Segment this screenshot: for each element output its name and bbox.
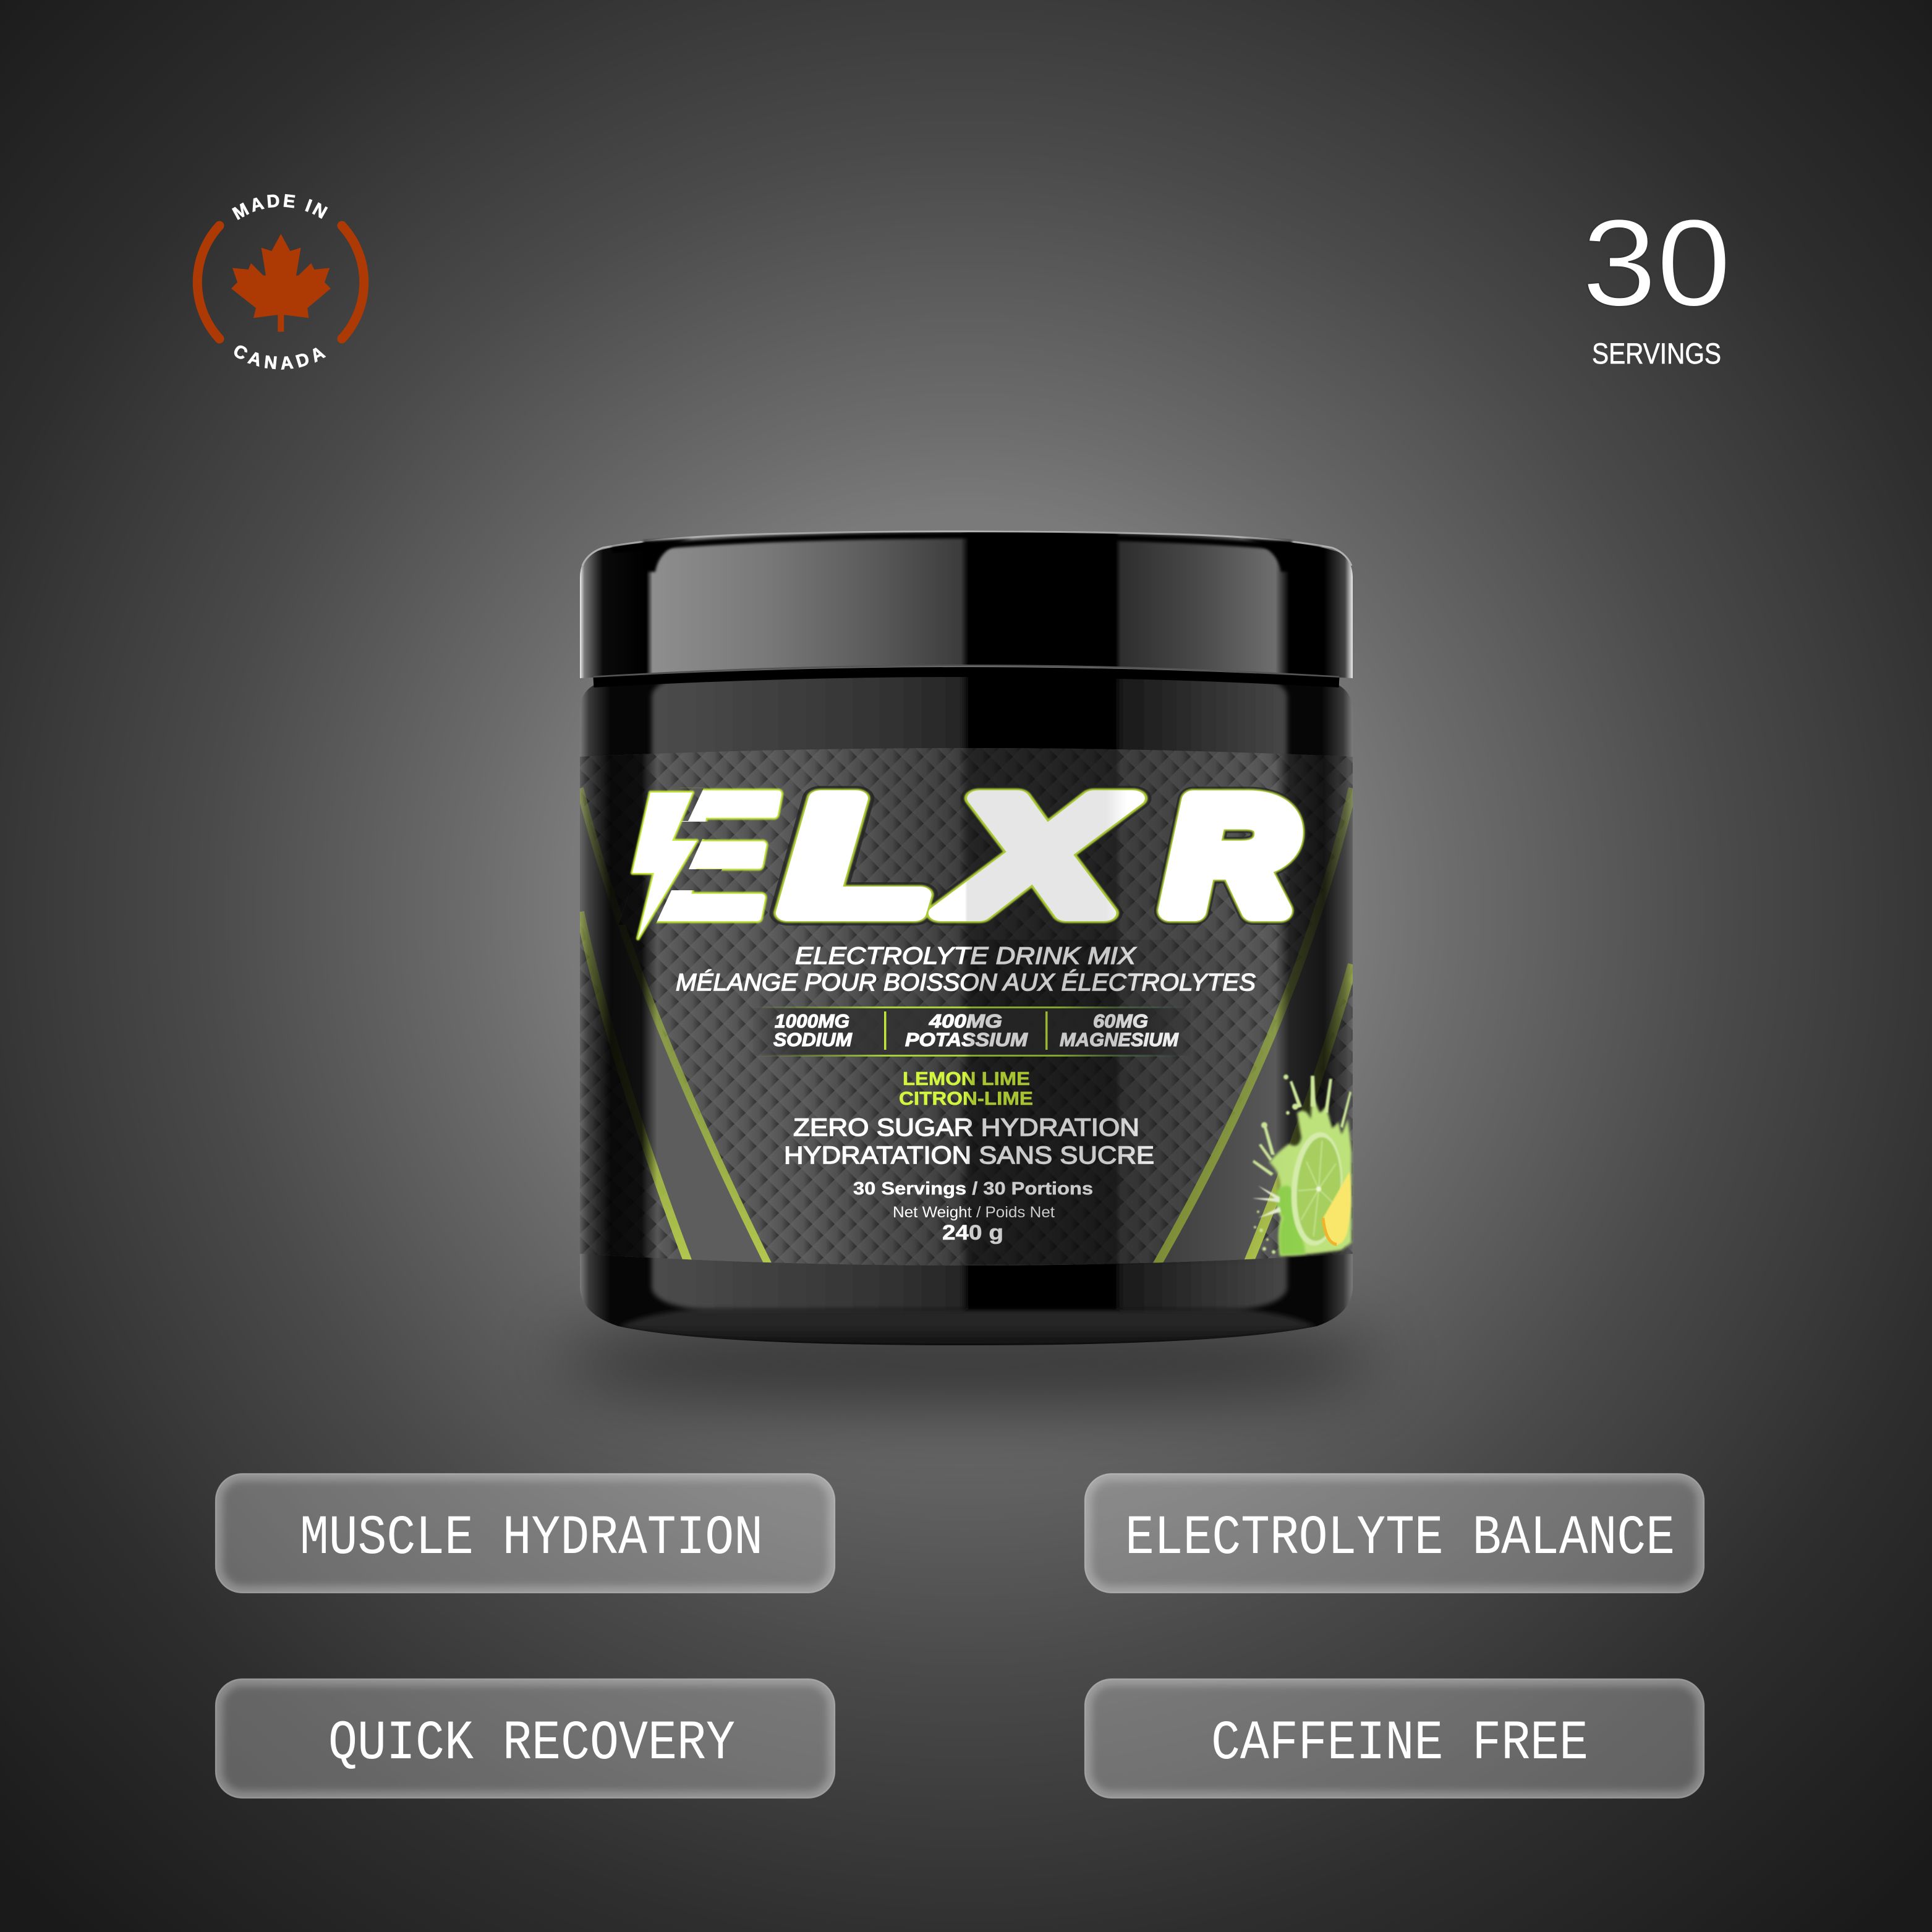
logo dark outline: X — [940, 763, 1133, 949]
strip top line — [753, 1006, 1190, 1008]
lid seam — [594, 665, 1339, 677]
E stem cut-outs — [618, 788, 728, 925]
lid top rim highlight — [582, 532, 1351, 566]
label servings: SERVINGS — [1592, 337, 1721, 370]
text: citron lime: CITRON-LIME — [899, 1087, 1033, 1109]
product descriptor — [676, 943, 1256, 996]
logo green outline: X — [940, 763, 1133, 949]
lightning bolt — [632, 793, 697, 938]
label gloss over text — [964, 940, 1298, 1264]
lightning bolt glow — [632, 793, 697, 938]
text: servings line: 30 Servings / 30 Portions — [853, 1179, 1093, 1199]
text: sans sucre: HYDRATATION SANS SUCRE — [784, 1142, 1154, 1169]
text: CAFFEINE FREE — [1211, 1713, 1588, 1776]
badge: made in canada — [193, 194, 368, 370]
text: french descriptor: MÉLANGE POUR BOISSON AUX ÉLECTROLYTES — [676, 969, 1256, 996]
right inner stripe — [1152, 788, 1353, 1274]
claims and descriptor block — [676, 940, 1298, 1264]
logo green outline: L — [783, 763, 934, 949]
logo dark outline: L — [783, 763, 934, 949]
number 30: 30 — [1582, 194, 1731, 332]
text: net weight: Net Weight / Poids Net — [893, 1204, 1055, 1221]
icon: maple leaf — [231, 234, 331, 332]
jar lid — [580, 530, 1353, 683]
icon: right arc — [342, 226, 364, 339]
benefit pill: muscle hydration — [215, 1473, 835, 1593]
left outer stripe — [580, 912, 692, 1274]
logo letter R white: R — [1167, 766, 1293, 945]
text: ELECTROLYTE BALANCE — [1125, 1507, 1675, 1570]
potassium value: 400MG — [929, 1010, 1002, 1032]
product jar — [575, 530, 1360, 1345]
label carbon pattern — [575, 736, 1360, 1280]
text: lemon lime: LEMON LIME — [903, 1068, 1030, 1089]
strip background — [753, 1008, 1190, 1056]
logo dark outline — [783, 763, 1293, 949]
lemon slice — [1323, 1172, 1351, 1245]
splash droplets — [1252, 1075, 1351, 1254]
text: zero sugar: ZERO SUGAR HYDRATION — [793, 1114, 1139, 1141]
flavour — [899, 1068, 1033, 1109]
benefit pill: caffeine free — [1084, 1679, 1704, 1798]
label shading — [575, 736, 1360, 1280]
text: canada: CANADA — [234, 345, 326, 370]
sodium value: 1000MG — [775, 1010, 849, 1032]
servings count — [1582, 194, 1731, 370]
text: QUICK RECOVERY — [328, 1713, 735, 1776]
icon: left arc — [197, 226, 219, 339]
lid body — [580, 530, 1353, 678]
electrolyte strip — [753, 1006, 1190, 1057]
logo dark outline: R — [1167, 766, 1293, 945]
claims — [784, 1114, 1154, 1245]
logo letter L white: L — [783, 763, 934, 949]
sodium label: SODIUM — [773, 1029, 853, 1050]
logo green outline — [783, 763, 1293, 949]
lid top black band — [612, 535, 1321, 550]
benefit pill: electrolyte balance — [1084, 1473, 1704, 1593]
logo green outline: R — [1167, 766, 1293, 945]
divider left — [884, 1011, 887, 1050]
jar drop shadow — [560, 1311, 1376, 1410]
benefit pill: quick recovery — [215, 1679, 835, 1798]
magnesium label: MAGNESIUM — [1060, 1029, 1179, 1050]
label — [575, 736, 1360, 1280]
right outer stripe — [1244, 964, 1353, 1274]
text: made in: MADE IN — [231, 194, 328, 220]
left smooth band — [580, 788, 775, 1274]
jar body — [580, 676, 1353, 1345]
strip bottom line — [753, 1055, 1190, 1057]
text: weight value: 240 g — [942, 1221, 1003, 1245]
magnesium value: 60MG — [1093, 1010, 1148, 1032]
green splash mass — [1269, 1094, 1351, 1256]
splash: lime and lemon — [1252, 1075, 1351, 1256]
logo letter X white: X — [940, 763, 1133, 949]
text: english descriptor: ELECTROLYTE DRINK MIX — [795, 943, 1137, 969]
body gloss — [618, 671, 1317, 1345]
logo letter E white: E — [654, 755, 780, 956]
lime slice — [1288, 1130, 1346, 1248]
product title: ELXR logo — [618, 755, 1293, 956]
potassium label: POTASSIUM — [905, 1029, 1028, 1050]
divider right — [1045, 1011, 1047, 1050]
text: MUSCLE HYDRATION — [300, 1507, 763, 1570]
left inner stripe — [580, 788, 773, 1274]
right smooth band — [1150, 788, 1353, 1274]
logo E green outline: E — [654, 755, 780, 956]
splash darker leaf — [1276, 1186, 1306, 1255]
lid highlight corners — [643, 539, 1292, 572]
